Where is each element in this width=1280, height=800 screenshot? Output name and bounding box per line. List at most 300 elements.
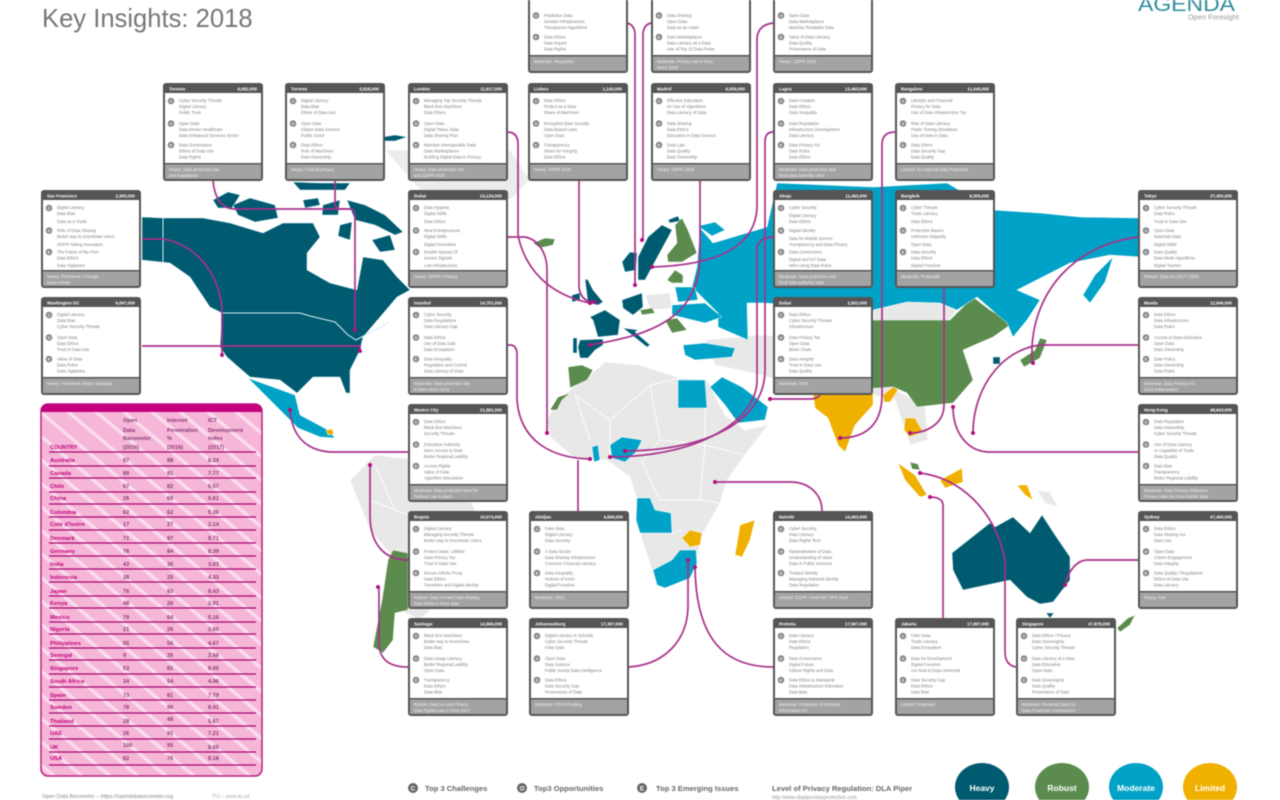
card: Abuja: Who Using Data Rules (789, 263, 831, 268)
table column headers: Data (123, 428, 136, 434)
card: Washington DC (41, 297, 141, 395)
card: Madrid: Education in Data Science (667, 133, 717, 138)
card: Dubai: Open Data (789, 341, 810, 346)
card: Helsinki: Open Data (789, 13, 810, 18)
card: Nairobi: Data Literacy (789, 532, 815, 537)
card: Bangalore: Data Ethics (911, 142, 932, 148)
card: Lisbon: Share of Machines (544, 110, 579, 115)
card: London: Open Data (424, 121, 445, 126)
card: Pretoria: Pretoria (779, 622, 796, 626)
card: Dubai: 2,502,000 (847, 300, 868, 306)
card: Lisbon: Encrypted Data Security (544, 121, 590, 126)
card: Jakarta: Digital Freedom (911, 662, 941, 667)
card: Dubai: Dubai (779, 300, 791, 306)
card: San Francisco: O (48, 229, 51, 233)
region: robust regulation countries (373, 218, 1135, 653)
legend: robust (1035, 763, 1089, 800)
card: San Francisco: Data Bias (57, 211, 75, 216)
card: Madrid: Data Sharing (667, 121, 692, 126)
card: Lisbon: Share for Integrity (544, 148, 578, 154)
card: Pretoria: E (780, 678, 783, 682)
card: Toronto second: Ethics of Data Use (301, 110, 336, 115)
table rows: 43 (123, 562, 129, 568)
table rows: Thailand (50, 719, 74, 725)
card: Toronto: E (170, 143, 173, 147)
card: Istanbul: Data Literacy of Data (424, 368, 464, 374)
card: Johannesburg: Data Science (545, 662, 571, 667)
card: Santiago: E (415, 678, 418, 682)
table rows: 21 (123, 627, 129, 633)
table rows: Denmark (50, 536, 76, 542)
card: Toronto second: O (292, 122, 295, 126)
card: Lagos: O (780, 122, 783, 126)
table rows: 34 (123, 679, 130, 685)
card: Beijing (651, 0, 751, 73)
card: Bangalore: Bangalore (901, 86, 923, 92)
table column headers: COUNTRY (50, 445, 78, 451)
legend: robust: Robust (1047, 783, 1077, 793)
card: Bangkok: Digital Freedom (911, 263, 941, 268)
legend: moderate (1109, 763, 1163, 800)
card: Dubai upper: Digital Skills (424, 211, 447, 216)
legend: limited: Limited (1195, 783, 1225, 793)
card: Bangkok: O (902, 229, 905, 233)
card: Bangalore (895, 83, 995, 181)
card: Bangalore: Privacy for Data (911, 104, 941, 109)
card: Toronto second: Digital Literacy (301, 98, 329, 103)
card: Lagos: local data authority rules (779, 173, 824, 178)
table rows: 67 (123, 484, 129, 490)
card: Nairobi: Understanding of Value (789, 555, 833, 560)
card: Pretoria: Data Ethics & Standards (789, 678, 835, 682)
card: Toronto: Open Data (179, 121, 200, 126)
card: Madrid: Data Law (667, 142, 686, 148)
card: Helsinki (773, 0, 873, 73)
card: Nairobi (773, 511, 873, 609)
card: Lagos: C (780, 99, 783, 103)
table rows: 84 (167, 549, 174, 555)
card: Jakarta: Trade Literacy (911, 639, 939, 644)
card: Singapore: Data Quality (1032, 684, 1056, 688)
card: Singapore: Data Literacy at a Data (1032, 656, 1075, 661)
table rows: 4.33 (208, 575, 219, 581)
card: Dubai: Block Chain (789, 347, 812, 352)
card: Istanbul: Data Inequality (424, 356, 453, 362)
card: Seoul: Transparent Algorithms (544, 25, 587, 30)
card: Washington DC: Trust in Data Use (57, 347, 90, 352)
card: Santiago: Open Data (424, 668, 445, 673)
card: Bangalore: Lifestyle and Financial (911, 98, 953, 103)
card: Helsinki: O (780, 14, 783, 18)
card: Tokyo: E (1145, 250, 1148, 254)
table rows: UK (50, 745, 59, 751)
card: Dubai upper: 24,134,000 (480, 194, 503, 198)
card: Toronto: Ethics of Data Use (179, 148, 214, 154)
card: Istanbul: Cyber Security (424, 312, 452, 317)
card: Lagos: Infrastructure Development (789, 127, 840, 132)
card: Bangkok: E (902, 250, 905, 254)
card: Mexico City: E (415, 464, 418, 468)
card: Nairobi: Trusted Identity (789, 570, 819, 576)
table column headers: Open (123, 418, 138, 424)
card: Tokyo: Cyber Security Threats (1154, 205, 1197, 210)
card: Johannesburg (529, 618, 629, 716)
table column headers: Penetration (167, 428, 198, 434)
card: Abuja: Moderate: Data protection and (779, 274, 836, 279)
table rows: 9 (123, 653, 126, 659)
card: Santiago: Data Rights Law in force 2017 (414, 708, 471, 713)
card: Jakarta (895, 618, 995, 716)
card: Bangkok: Data Security (911, 250, 937, 254)
table rows: Canada (50, 471, 72, 477)
card: Bangalore: Use of Data Infrastructure Tax (911, 110, 967, 115)
table rows: 8.43 (208, 589, 219, 595)
table rows: Australia (50, 458, 76, 464)
card: Santiago: Black Box Machines (424, 633, 462, 638)
card: London: C (415, 99, 418, 103)
card: Tokyo: Digital Tourism (1154, 263, 1182, 268)
card: Tokyo: 37,400,000 (1210, 194, 1233, 198)
card: Singapore (1016, 618, 1116, 716)
card: Bogota: 10,574,000 (480, 514, 503, 520)
card: Sydney: Citizen Engagement (1154, 555, 1193, 560)
card: Washington DC: O (48, 336, 51, 340)
card: Mexico City: More Access to Data (424, 448, 463, 453)
card: Manila: Open Data (1154, 341, 1175, 346)
card: Toronto second: Role of Machines (301, 148, 333, 154)
table rows: Philippines (50, 641, 81, 647)
card: London: Data Marketplaces (424, 148, 459, 154)
card: Bangkok: Bangkok (901, 194, 920, 198)
table rows: 25 (167, 575, 173, 581)
card: Jakarta: Data Ethics (911, 684, 932, 688)
card: Helsinki: E (780, 35, 783, 39)
card: Beijing: Open Data (667, 19, 688, 24)
card: Singapore: Provenance of Data (1032, 690, 1070, 694)
card: Lisbon (528, 83, 628, 181)
card: Toronto second (285, 83, 385, 181)
table rows: Chile (50, 484, 65, 490)
card: Singapore: Moderate: Personal Data Act (1022, 702, 1076, 707)
card: Abuja: Transparency and Data Privacy (789, 242, 848, 247)
card: Washington DC: Cyber Security Threats (57, 324, 100, 329)
card: Hong Kong: Data Regulation (1154, 419, 1185, 424)
card: London: E (415, 143, 418, 147)
card: Dubai: Data Quality (789, 368, 813, 374)
card: Lisbon: 1,140,000 (602, 86, 623, 92)
card: London: Black Box Machines (424, 104, 462, 109)
legend: limited (1183, 763, 1237, 800)
card: San Francisco: Digital Literacy (57, 205, 85, 210)
card: Dubai upper: Data Ethics (424, 219, 445, 224)
card: Lagos: Data Literacy (789, 133, 815, 138)
card: Johannesburg: E (536, 678, 539, 682)
source note (42, 794, 250, 800)
table rows: 76 (167, 756, 173, 762)
card: Singapore: Data Ethics / Privacy (1032, 633, 1072, 638)
card: Abidjan: C (536, 527, 539, 531)
card: Manila: E (1145, 357, 1148, 361)
card: Bogota: O (415, 550, 418, 554)
card: Johannesburg: Open Data (545, 656, 566, 661)
table column headers: (2016) (123, 445, 139, 451)
card: Madrid: O (658, 122, 661, 126)
card: Singapore: E (1023, 678, 1026, 682)
card: Dubai (773, 297, 873, 395)
card: London: Maintain Interoperable Data (424, 142, 476, 148)
card: Tokyo: O (1145, 229, 1148, 233)
card: Washington DC: Washington DC (47, 300, 80, 306)
table rows: 2.60 (208, 627, 219, 633)
card: Hong Kong: O (1145, 443, 1148, 447)
card: Madrid: Heavy: GDPR 2018 (657, 167, 694, 172)
card: Santiago (408, 618, 508, 716)
card: Pretoria: Data Governance (789, 656, 822, 661)
table rows: 95 (167, 743, 173, 749)
card: Seoul: Data Rights (544, 46, 566, 52)
card: Lisbon: Data Ethics (544, 98, 565, 103)
card: Bogota: C (415, 527, 418, 531)
card: Bogota: Data Ethics (424, 576, 445, 582)
card: Singapore: C (1023, 634, 1026, 638)
card: Bogota: Robust: Data Act and Data Sharing (414, 595, 480, 600)
table rows: 87 (123, 458, 129, 464)
table rows: 73 (123, 693, 129, 699)
table rows: 2.91 (208, 601, 219, 607)
table rows: 7.77 (208, 471, 219, 477)
region: moderate regulation countries (248, 183, 1140, 588)
card: Toronto second: C (292, 99, 295, 103)
card: Johannesburg: Fake Data (545, 645, 565, 650)
table rows: Kenya (50, 601, 68, 607)
card: San Francisco: Better way to Incentivise Users (57, 234, 114, 239)
card: Beijing: Data Literacy as a Data (667, 40, 711, 46)
table rows: 79 (123, 615, 129, 621)
card: Bogota (408, 511, 508, 609)
table rows: 93 (167, 589, 173, 595)
card: Helsinki: Provenance of Data (789, 46, 827, 52)
table rows: South Africa (50, 679, 85, 685)
table rows: 35 (167, 562, 173, 568)
table rows: 55 (123, 641, 129, 647)
table rows: 8.24 (208, 458, 220, 464)
card: Bangkok: Data Ethics (911, 256, 932, 260)
card: Dubai upper: Digital Innovation (424, 242, 457, 247)
legend: heavy (955, 763, 1009, 800)
table rows: 26 (167, 653, 173, 659)
card: Jakarta: Jakarta (901, 622, 917, 626)
card: Madrid: Effective Education (667, 98, 703, 103)
card: Bangalore: Limited: No regional Data Protection (901, 167, 969, 172)
card: Toronto second: Data Ethics (301, 142, 322, 148)
card: Hong Kong: 48,943,000 (1210, 408, 1233, 412)
card: Bangalore: C (902, 99, 905, 103)
card: London: and GDPR 2018 (414, 173, 445, 178)
card: Seoul: Moderate: Regulation (534, 59, 575, 64)
card: Toronto: Data-Driven Healthcare (179, 127, 223, 132)
card: Bangkok: Cyber Threats (911, 205, 937, 210)
table rows: Mexico (50, 615, 70, 621)
card: Washington DC: Data Bias (57, 318, 75, 323)
card: Abidjan: Abidjan (535, 514, 551, 520)
card: San Francisco: GDPR Taking Innovation (57, 242, 103, 247)
card: Istanbul: Data Regulations (424, 318, 456, 323)
card: Singapore: Singapore (1022, 622, 1044, 626)
card: Dubai: Cyber Security Threats (789, 318, 832, 323)
source note: Open Data Barometer – https://opendatabarometer.org (42, 794, 173, 800)
card: Abuja (773, 190, 873, 288)
card: Abuja: Data for Mobile Service (789, 236, 833, 241)
table column headers: Internet (167, 418, 188, 424)
card: Bogota: Digital Literacy (424, 526, 452, 531)
card: Singapore: 47,878,000 (1088, 622, 1111, 626)
card: San Francisco: Data Activity (47, 280, 71, 285)
card: San Francisco: Data Vigilantes (57, 263, 85, 268)
card: Seoul: Data Impact (544, 40, 567, 46)
card: Washington DC: Data Vigilantes (57, 368, 85, 374)
card: Jakarta: E (902, 678, 905, 682)
card: Johannesburg: C (536, 634, 539, 638)
card: London: Data Ethics (424, 110, 445, 115)
card: Washington DC: E (48, 357, 51, 361)
card: Jakarta: 17,997,000 (967, 622, 990, 626)
card: Bogota: Managing Security Threats (424, 532, 474, 537)
card: Pretoria: Moderate: Protection of Personal (779, 702, 840, 707)
table rows: 62 (167, 510, 173, 516)
legend: top 3 opportunities: Top3 Opportunities (534, 784, 603, 793)
card: Toronto second: Data Bias (301, 104, 319, 109)
card: Hong Kong: Better Regional Liability (1154, 476, 1199, 480)
card: Abuja: Digital Identity (789, 228, 816, 233)
card: Lisbon: Transparency (544, 142, 570, 148)
card: Lisbon: E (535, 143, 538, 147)
card: Lagos: Data Privacy Act (789, 142, 821, 148)
card: Nairobi: 14,463,000 (845, 514, 868, 520)
table column headers: Development (208, 428, 243, 434)
card: Mexico City: Education Authority (424, 442, 461, 447)
card: Bangkok: Trade Literacy (911, 211, 939, 216)
table rows: 4.96 (208, 679, 219, 685)
card: Bangkok: Protection Basics (911, 228, 943, 233)
table rows: 28 (123, 719, 129, 725)
card: London: Building Digital Data in Privacy (424, 154, 482, 160)
card: Washington DC: Open Data (57, 335, 78, 340)
card: Toronto second: Toronto (291, 86, 308, 92)
table rows: 78 (123, 705, 129, 711)
card: Pretoria: C (780, 634, 783, 638)
card: Nairobi: Nairobi (779, 514, 794, 520)
card: Bangkok: Data Ethics (911, 219, 932, 224)
card: Abidjan: A Data Sector (545, 549, 571, 554)
card: Santiago: Data Usage Literacy (424, 656, 463, 661)
card: Manila: Access to Data Education (1154, 335, 1203, 340)
card: Singapore: Data Education (1032, 662, 1061, 667)
logo (1138, 0, 1239, 22)
card: Manila: Data Ownership (1154, 347, 1185, 352)
card: San Francisco (41, 190, 141, 288)
card: Tokyo: Open Data (1154, 228, 1175, 233)
card: Johannesburg: Cyber Security Threats (545, 639, 588, 644)
card: Manila: C (1145, 313, 1148, 317)
card: Johannesburg: Data Security Gap (545, 684, 580, 688)
card: Dubai: Data Ethics (789, 312, 810, 317)
card: Jakarta: Data Bias (911, 690, 929, 694)
card: Sydney: O (1145, 550, 1148, 554)
card: Madrid: Data Literacy of Data (667, 110, 707, 115)
table rows: 81 (167, 666, 173, 672)
card: Toronto: and regulations (169, 173, 198, 178)
card: Dubai upper: Dubai (414, 194, 426, 198)
card: London: O (415, 122, 418, 126)
table rows: Singapore (50, 666, 79, 672)
card: Sydney: C (1145, 527, 1148, 531)
card: Istanbul: Use of Data Sets (424, 341, 456, 346)
card: Hong Kong: Data Bias (1154, 464, 1172, 468)
card: Dubai: Infrastructure (789, 324, 814, 329)
table rows: 26 (167, 627, 173, 633)
card: Singapore: Open Data (1032, 668, 1053, 673)
card: Sydney: Ethics of Data Use (1154, 576, 1189, 582)
card: Bangalore: Rise of Data Literacy (911, 121, 951, 126)
card: San Francisco: The Future of the Firm (57, 250, 99, 254)
card: Johannesburg: Digital Literacy in Schools (545, 633, 593, 638)
card: Sydney: Data Integrity (1154, 561, 1180, 566)
legend: moderate: Moderate (1117, 783, 1155, 793)
card: London: Heavy: Data protection Act (414, 167, 464, 172)
card: Mexico City: Black Box Machines (424, 425, 462, 430)
card: Toronto: Public Trust (179, 110, 202, 115)
card: San Francisco: Data Ethics (57, 256, 78, 260)
card: Tokyo: Digital Skills (1154, 242, 1177, 247)
card: Singapore: Data Protection Commission (1022, 708, 1076, 713)
table rows: 90 (167, 705, 173, 711)
table rows: Japan (50, 589, 67, 595)
card: San Francisco: E (48, 250, 51, 254)
us canada border (163, 218, 390, 340)
card: Singapore: Cyber Security Threats (1032, 645, 1075, 650)
card: Abidjan: Data Inequality (545, 570, 574, 576)
card: Dubai: Data Privacy Tax (789, 335, 821, 340)
card: Santiago: Transparency (424, 678, 450, 682)
card: Bogota: Protect Value, Utilities (424, 549, 465, 554)
table rows: 17 (123, 522, 129, 528)
card: Abidjan: Notions of Inner (545, 576, 575, 582)
card: Tokyo: Robust: Data Act 2017 / 2020 (1144, 274, 1199, 279)
card: Pretoria: O (780, 657, 783, 661)
card: Mexico City: Federal Law in place (414, 494, 453, 499)
table rows: 8.41 (208, 705, 219, 711)
card: Pretoria: Data Ethics (789, 639, 810, 644)
table rows: China (50, 496, 67, 502)
card: Abuja: Digital Literacy (789, 213, 817, 218)
card: Istanbul: Data Ecosystem (424, 347, 455, 352)
card: Washington DC: Heavy: Patchwork Sector Standard (47, 381, 113, 386)
card: Madrid: on Use of Algorithms (667, 104, 706, 109)
card: Beijing: Data Sharing (667, 13, 692, 18)
card: Hong Kong: E (1145, 464, 1148, 468)
card: Abuja: Cyber Security (789, 205, 817, 210)
card: Madrid: 6,559,000 (725, 86, 746, 92)
card: Dubai upper: Data Hygiene (424, 205, 450, 210)
card: Johannesburg: Johannesburg (535, 622, 566, 626)
card: Madrid (651, 83, 751, 181)
card: Madrid: Madrid (657, 86, 672, 92)
table column headers: Index (208, 436, 223, 442)
card: Nairobi: Data Regulation (789, 582, 820, 588)
table rows: Senegal (50, 653, 73, 659)
card: Lisbon: Data Ethics (544, 154, 565, 160)
card: Washington DC: Value of Data (57, 356, 83, 362)
